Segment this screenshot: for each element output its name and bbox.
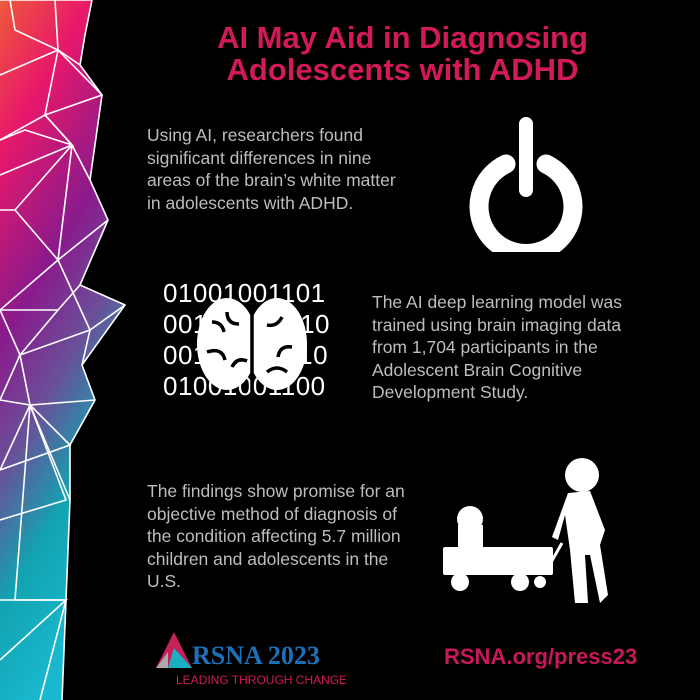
text block 3: The findings show promise for an objective method of diagnosis of the condition affecting 5.7 million children and adolescents in the U.S. (147, 481, 405, 591)
title (217, 20, 588, 87)
title: Adolescents with ADHD (227, 52, 578, 87)
logo: RSNA 2023: RSNA 2023 (192, 641, 320, 670)
icon: binary brain: 01001001101 (163, 278, 326, 308)
logo: RSNA 2023: LEADING THROUGH CHANGE (176, 673, 347, 687)
text block 1: Using AI, researchers found significant differences in nine areas of the brain’s white matter in adolescents with ADHD. (147, 125, 396, 212)
icon: power (470, 117, 582, 252)
icon: binary brain: 001 110 (163, 340, 328, 370)
icon: binary brain (163, 278, 330, 401)
logo: RSNA 2023 (156, 632, 347, 687)
text block 2: The AI deep learning model was trained using brain imaging data from 1,704 participants in the Adolescent Brain Cognitive Development Study. (372, 292, 622, 402)
decorative gradient polygon strip (0, 0, 126, 700)
icon: child with wagon (443, 458, 608, 603)
icon: binary brain: 01001001100 (163, 371, 326, 401)
title: AI May Aid in Diagnosing (217, 20, 588, 55)
link text: RSNA.org/press23 (444, 644, 637, 669)
icon: binary brain: 001 010 (163, 309, 330, 339)
